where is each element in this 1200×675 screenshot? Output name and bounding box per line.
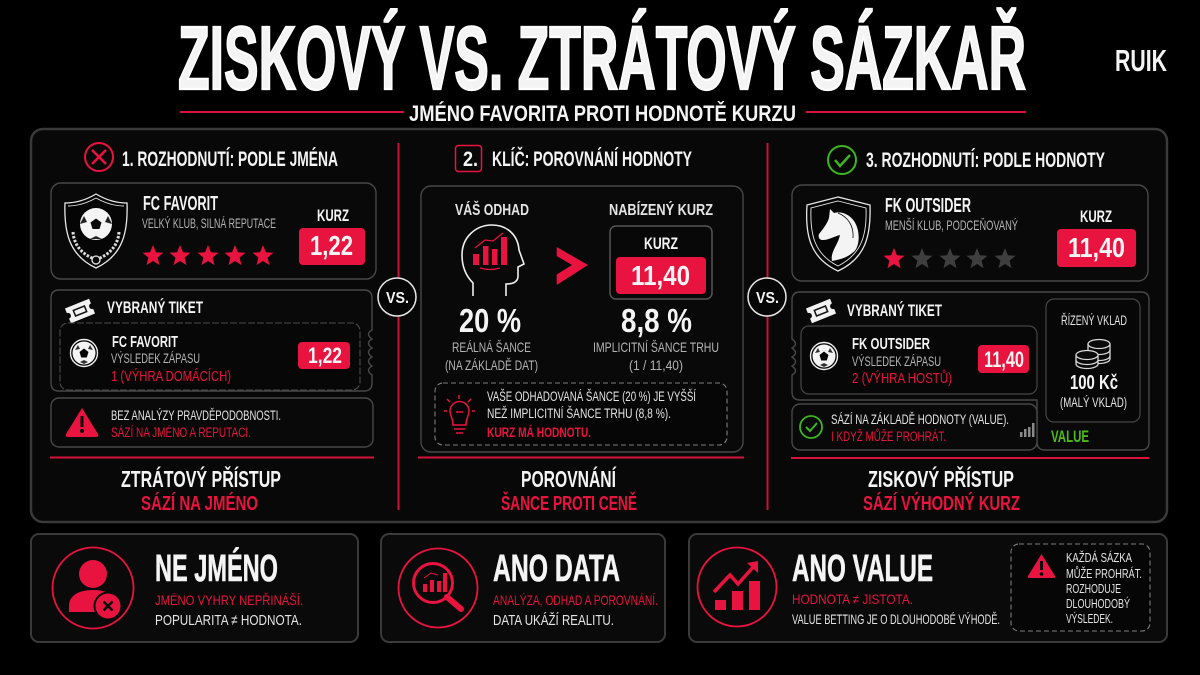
ticket odds bbox=[978, 345, 1029, 373]
icon: shield with ball bbox=[65, 194, 127, 268]
ticket odds: 11,40 bbox=[984, 347, 1024, 372]
column: profit approach bbox=[791, 146, 1149, 515]
panel red text: JMÉNO VYHRY NEPŘINÁŠÍ. bbox=[155, 592, 303, 608]
odds label: KURZ bbox=[317, 206, 349, 225]
ticket heading: VYBRANÝ TIKET bbox=[847, 301, 942, 320]
odds value bbox=[1057, 229, 1136, 267]
star rating bbox=[884, 248, 1016, 268]
team description: VELKÝ KLUB, SILNÁ REPUTACE bbox=[142, 215, 276, 231]
icon: check bbox=[800, 416, 822, 438]
greater-than sign bbox=[557, 247, 588, 285]
odds value: 11,40 bbox=[1068, 232, 1125, 263]
ticket team: FK OUTSIDER bbox=[852, 336, 930, 353]
icon: person with cross bbox=[52, 548, 134, 628]
icon: rising chart bbox=[698, 548, 776, 626]
market caption: IMPLICITNÍ ŠANCE TRHU bbox=[593, 339, 719, 355]
icon: coins bbox=[1076, 340, 1110, 369]
estimate caption bbox=[445, 339, 538, 373]
number badge: 2. bbox=[463, 148, 478, 171]
star rating bbox=[142, 245, 274, 265]
comparison card bbox=[421, 186, 743, 452]
market caption: (1 / 11,40) bbox=[629, 357, 683, 373]
column verdict: ZTRÁTOVÝ PŘÍSTUP bbox=[121, 465, 281, 492]
insight conclusion: KURZ MÁ HODNOTU. bbox=[487, 425, 591, 440]
icon: ticket bbox=[806, 299, 836, 323]
offered odds label: NABÍZENÝ KURZ bbox=[609, 200, 713, 219]
panel: ne jméno bbox=[31, 534, 358, 642]
icon: shield with horse bbox=[807, 197, 870, 271]
panel: ano data bbox=[381, 534, 665, 642]
risk text: DLOUHODOBÝ bbox=[1066, 596, 1130, 611]
icon: head with chart bbox=[462, 225, 524, 296]
column verdict subtitle: SÁZÍ VÝHODNÝ KURZ bbox=[863, 491, 1020, 515]
offered odds box: 11,40 bbox=[631, 260, 690, 291]
icon: green check bbox=[828, 146, 856, 174]
insight text second line: NEŽ IMPLICITNÍ ŠANCE TRHU (8,8 %). bbox=[487, 406, 671, 421]
icon: magnifier with chart bbox=[398, 548, 478, 628]
offered odds box: KURZ bbox=[644, 234, 678, 253]
brand label: RUIK bbox=[1115, 43, 1167, 78]
value note text red: I KDYŽ MŮŽE PROHRÁT. bbox=[831, 429, 946, 444]
ticket inner bbox=[60, 323, 360, 390]
panel heading: ANO DATA bbox=[493, 548, 620, 590]
panel heading: ANO VALUE bbox=[792, 548, 933, 590]
risk text: VÝSLEDEK. bbox=[1066, 611, 1113, 626]
panel text: DATA UKÁŽÍ REALITU. bbox=[493, 612, 614, 629]
team name: FC FAVORIT bbox=[143, 193, 218, 215]
team description: MENŠÍ KLUB, PODCEŇOVANÝ bbox=[885, 217, 1018, 233]
ticket pick: 2 (VÝHRA HOSTŮ) bbox=[852, 369, 952, 387]
badge: VS left: VS. bbox=[386, 290, 409, 307]
estimate caption: REÁLNÁ ŠANCE bbox=[452, 339, 531, 355]
risk text: KAŽDÁ SÁZKA bbox=[1066, 550, 1132, 565]
estimate caption: (NA ZÁKLADĚ DAT) bbox=[445, 357, 538, 373]
stake box bbox=[1046, 299, 1140, 422]
panel text: POPULARITA ≠ HODNOTA. bbox=[155, 612, 302, 629]
insight callout bbox=[435, 383, 727, 445]
offered odds box bbox=[610, 226, 712, 299]
ticket inner bbox=[801, 326, 1037, 394]
number badge bbox=[456, 146, 482, 172]
column heading: 1. ROZHODNUTÍ: PODLE JMÉNA bbox=[122, 148, 338, 171]
icon: mini chart bbox=[1020, 423, 1034, 437]
icon: red cross bbox=[85, 143, 113, 171]
market caption bbox=[593, 339, 719, 373]
icon: ball bbox=[810, 342, 838, 370]
badge: VS right: VS. bbox=[756, 290, 779, 307]
odds value: 1,22 bbox=[310, 230, 353, 261]
value label: VALUE bbox=[1051, 427, 1089, 446]
panel heading: NE JMÉNO bbox=[155, 546, 278, 590]
badge: VS right bbox=[748, 278, 786, 316]
odds label: KURZ bbox=[1080, 207, 1112, 226]
ticket card bbox=[51, 290, 372, 391]
team name: FK OUTSIDER bbox=[885, 195, 971, 217]
column verdict: POROVNÁNÍ bbox=[521, 465, 616, 492]
column verdict: ZISKOVÝ PŘÍSTUP bbox=[868, 465, 1014, 492]
ticket team: FC FAVORIT bbox=[112, 334, 178, 351]
stake note: (MALÝ VKLAD) bbox=[1060, 395, 1127, 410]
value note box bbox=[792, 404, 1037, 450]
value note text: SÁZÍ NA ZÁKLADĚ HODNOTY (VALUE). bbox=[831, 412, 1009, 427]
ticket market: VÝSLEDEK ZÁPASU bbox=[852, 353, 941, 369]
column verdict subtitle: SÁZÍ NA JMÉNO bbox=[141, 492, 258, 515]
estimate percentage: 20 % bbox=[459, 302, 521, 339]
panel red text: HODNOTA ≠ JISTOTA. bbox=[792, 591, 913, 607]
ticket market: VÝSLEDEK ZÁPASU bbox=[111, 350, 200, 366]
column: loss approach bbox=[50, 143, 376, 515]
icon: warning bbox=[66, 408, 98, 437]
panel text: VALUE BETTING JE O DLOUHODOBÉ VÝHODĚ. bbox=[792, 611, 1000, 627]
column verdict subtitle: ŠANCE PROTI CENĚ bbox=[501, 491, 637, 515]
estimate label: VÁŠ ODHAD bbox=[455, 200, 529, 219]
ticket card bbox=[792, 292, 1149, 450]
column: comparison bbox=[418, 146, 744, 515]
icon: light bulb bbox=[444, 395, 475, 433]
subtitle: JMÉNO FAVORITA PROTI HODNOTĚ KURZU bbox=[409, 101, 796, 126]
column heading: KLÍČ: POROVNÁNÍ HODNOTY bbox=[492, 147, 692, 171]
ticket odds: 1,22 bbox=[308, 343, 342, 368]
odds value bbox=[299, 228, 365, 265]
icon: warning bbox=[1028, 554, 1055, 578]
main panel bbox=[31, 129, 1167, 522]
ticket pick: 1 (VÝHRA DOMÁCÍCH) bbox=[111, 368, 231, 385]
risk text: ROZHODUJE bbox=[1066, 581, 1121, 596]
risk text bbox=[1066, 550, 1142, 626]
market percentage: 8,8 % bbox=[621, 302, 692, 339]
team card: FK Outsider bbox=[792, 185, 1148, 281]
risk callout bbox=[1011, 544, 1150, 631]
icon: ball bbox=[70, 340, 98, 366]
team card: FC Favorit bbox=[51, 183, 376, 279]
panel red text: ANALÝZA, ODHAD A POROVNÁNÍ. bbox=[493, 592, 658, 608]
warning text red: SÁZÍ NA JMÉNO A REPUTACI. bbox=[111, 425, 251, 440]
stake label: ŘÍZENÝ VKLAD bbox=[1061, 313, 1127, 328]
icon: ticket bbox=[65, 299, 95, 323]
ticket heading: VYBRANÝ TIKET bbox=[107, 298, 203, 317]
badge: VS left bbox=[378, 278, 416, 316]
warning text: BEZ ANALÝZY PRAVDĚPODOBNOSTI. bbox=[111, 408, 281, 423]
warning box bbox=[51, 398, 373, 447]
insight text: VAŠE ODHADOVANÁ ŠANCE (20 %) JE VYŠŠÍ bbox=[487, 389, 696, 404]
stake amount: 100 Kč bbox=[1070, 372, 1118, 394]
panel: ano value bbox=[689, 534, 1167, 642]
risk text: MŮŽE PROHRÁT. bbox=[1066, 566, 1142, 581]
